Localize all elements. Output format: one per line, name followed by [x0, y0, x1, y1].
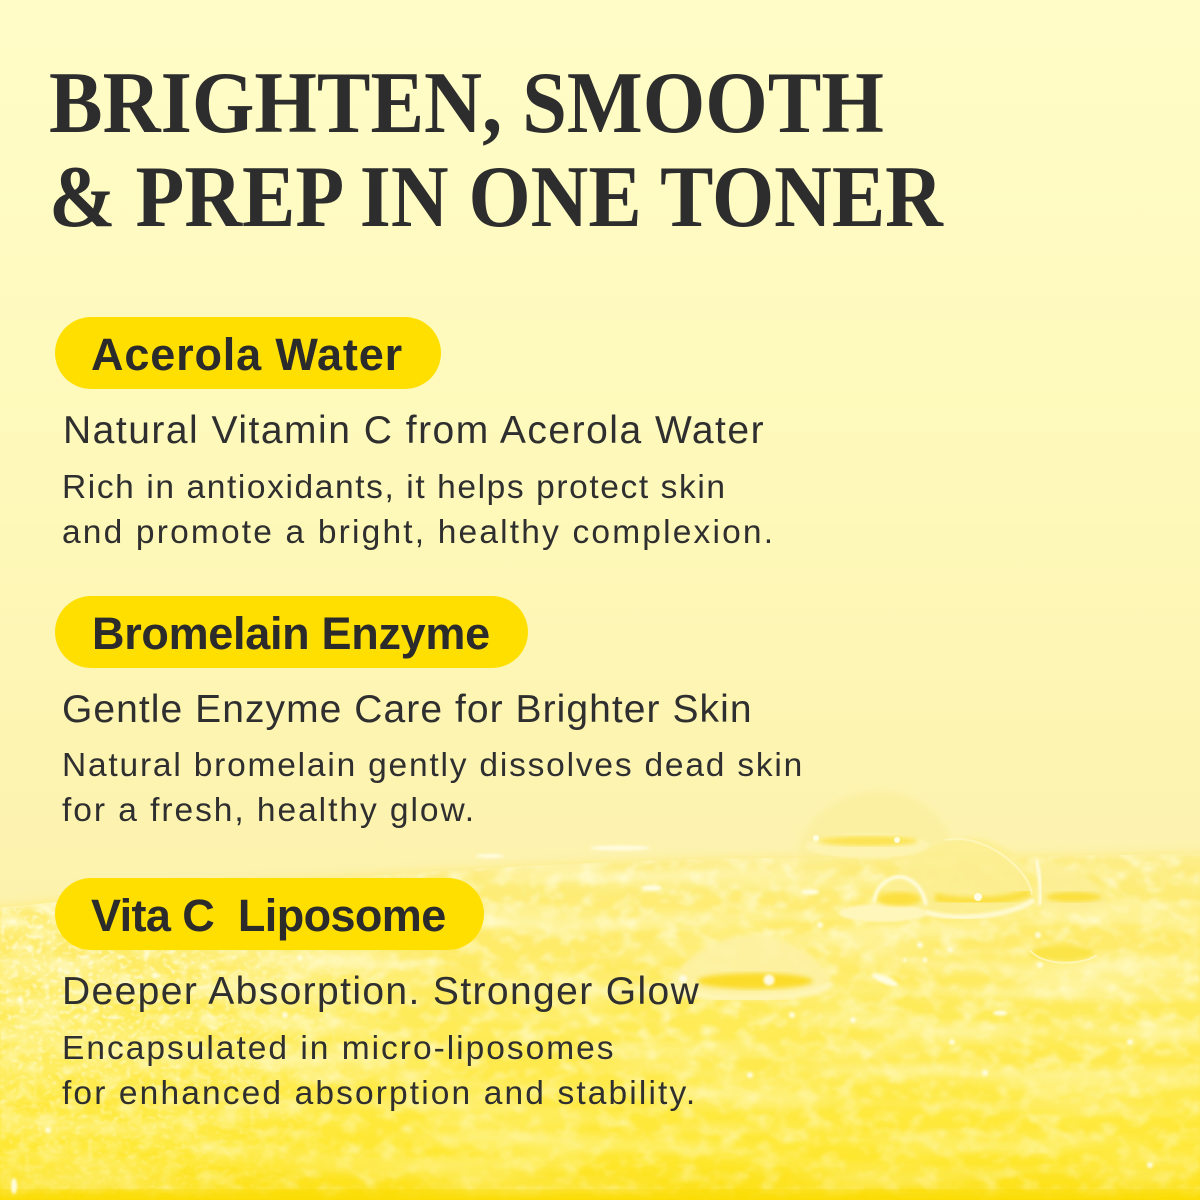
- ingredient: Acerola Water: [55, 317, 775, 550]
- ingredient: Vita C Liposome: [55, 878, 700, 1112]
- pill: Bromelain Enzyme: Bromelain Enzyme: [92, 608, 490, 659]
- description: Acerola Water: Rich in antioxidants, it helps protect skin: [62, 469, 727, 506]
- pill: Vita C Liposome: [55, 878, 484, 950]
- description: Vita C Liposome: Encapsulated in micro-liposomes: [62, 1030, 616, 1067]
- ingredient: Bromelain Enzyme: [55, 596, 804, 828]
- droplet: small bubble: [839, 877, 927, 922]
- droplet: back lens: [806, 834, 930, 858]
- description: Acerola Water: [62, 469, 775, 550]
- subheading: Vita C Liposome: Deeper Absorption. Stronger Glow: [62, 970, 700, 1013]
- title: & PREP IN ONE TONER: [49, 149, 943, 246]
- description: Bromelain Enzyme: [62, 747, 804, 828]
- droplet: lower left: [668, 935, 833, 1000]
- subheading: Acerola Water: Natural Vitamin C from Acerola Water: [63, 409, 765, 452]
- description: Bromelain Enzyme: for a fresh, healthy glow.: [62, 792, 476, 828]
- pill: Vita C Liposome: Vita C Liposome: [91, 890, 446, 941]
- droplet: faint flat: [1030, 945, 1097, 963]
- description: Bromelain Enzyme: Natural bromelain gently dissolves dead skin: [62, 747, 804, 784]
- splash highlights: [11, 846, 1153, 1194]
- liquid speckle: [0, 840, 1200, 1200]
- droplet: right: [1034, 860, 1108, 911]
- pill: Bromelain Enzyme: [55, 596, 528, 668]
- title: BRIGHTEN, SMOOTH: [49, 55, 884, 152]
- bottom saturated band: [0, 1192, 1200, 1200]
- droplet: back dome: [797, 791, 954, 870]
- description: Vita C Liposome: [62, 1030, 697, 1112]
- pill: Acerola Water: Acerola Water: [91, 329, 403, 380]
- description: Acerola Water: and promote a bright, healthy complexion.: [62, 514, 775, 550]
- liquid surface: [0, 852, 1200, 1200]
- title: [49, 55, 944, 246]
- description: Vita C Liposome: for enhanced absorption and stability.: [62, 1074, 697, 1112]
- pill: Acerola Water: [55, 317, 441, 389]
- droplet: main: [878, 838, 1034, 919]
- subheading: Bromelain Enzyme: Gentle Enzyme Care for Brighter Skin: [62, 688, 753, 731]
